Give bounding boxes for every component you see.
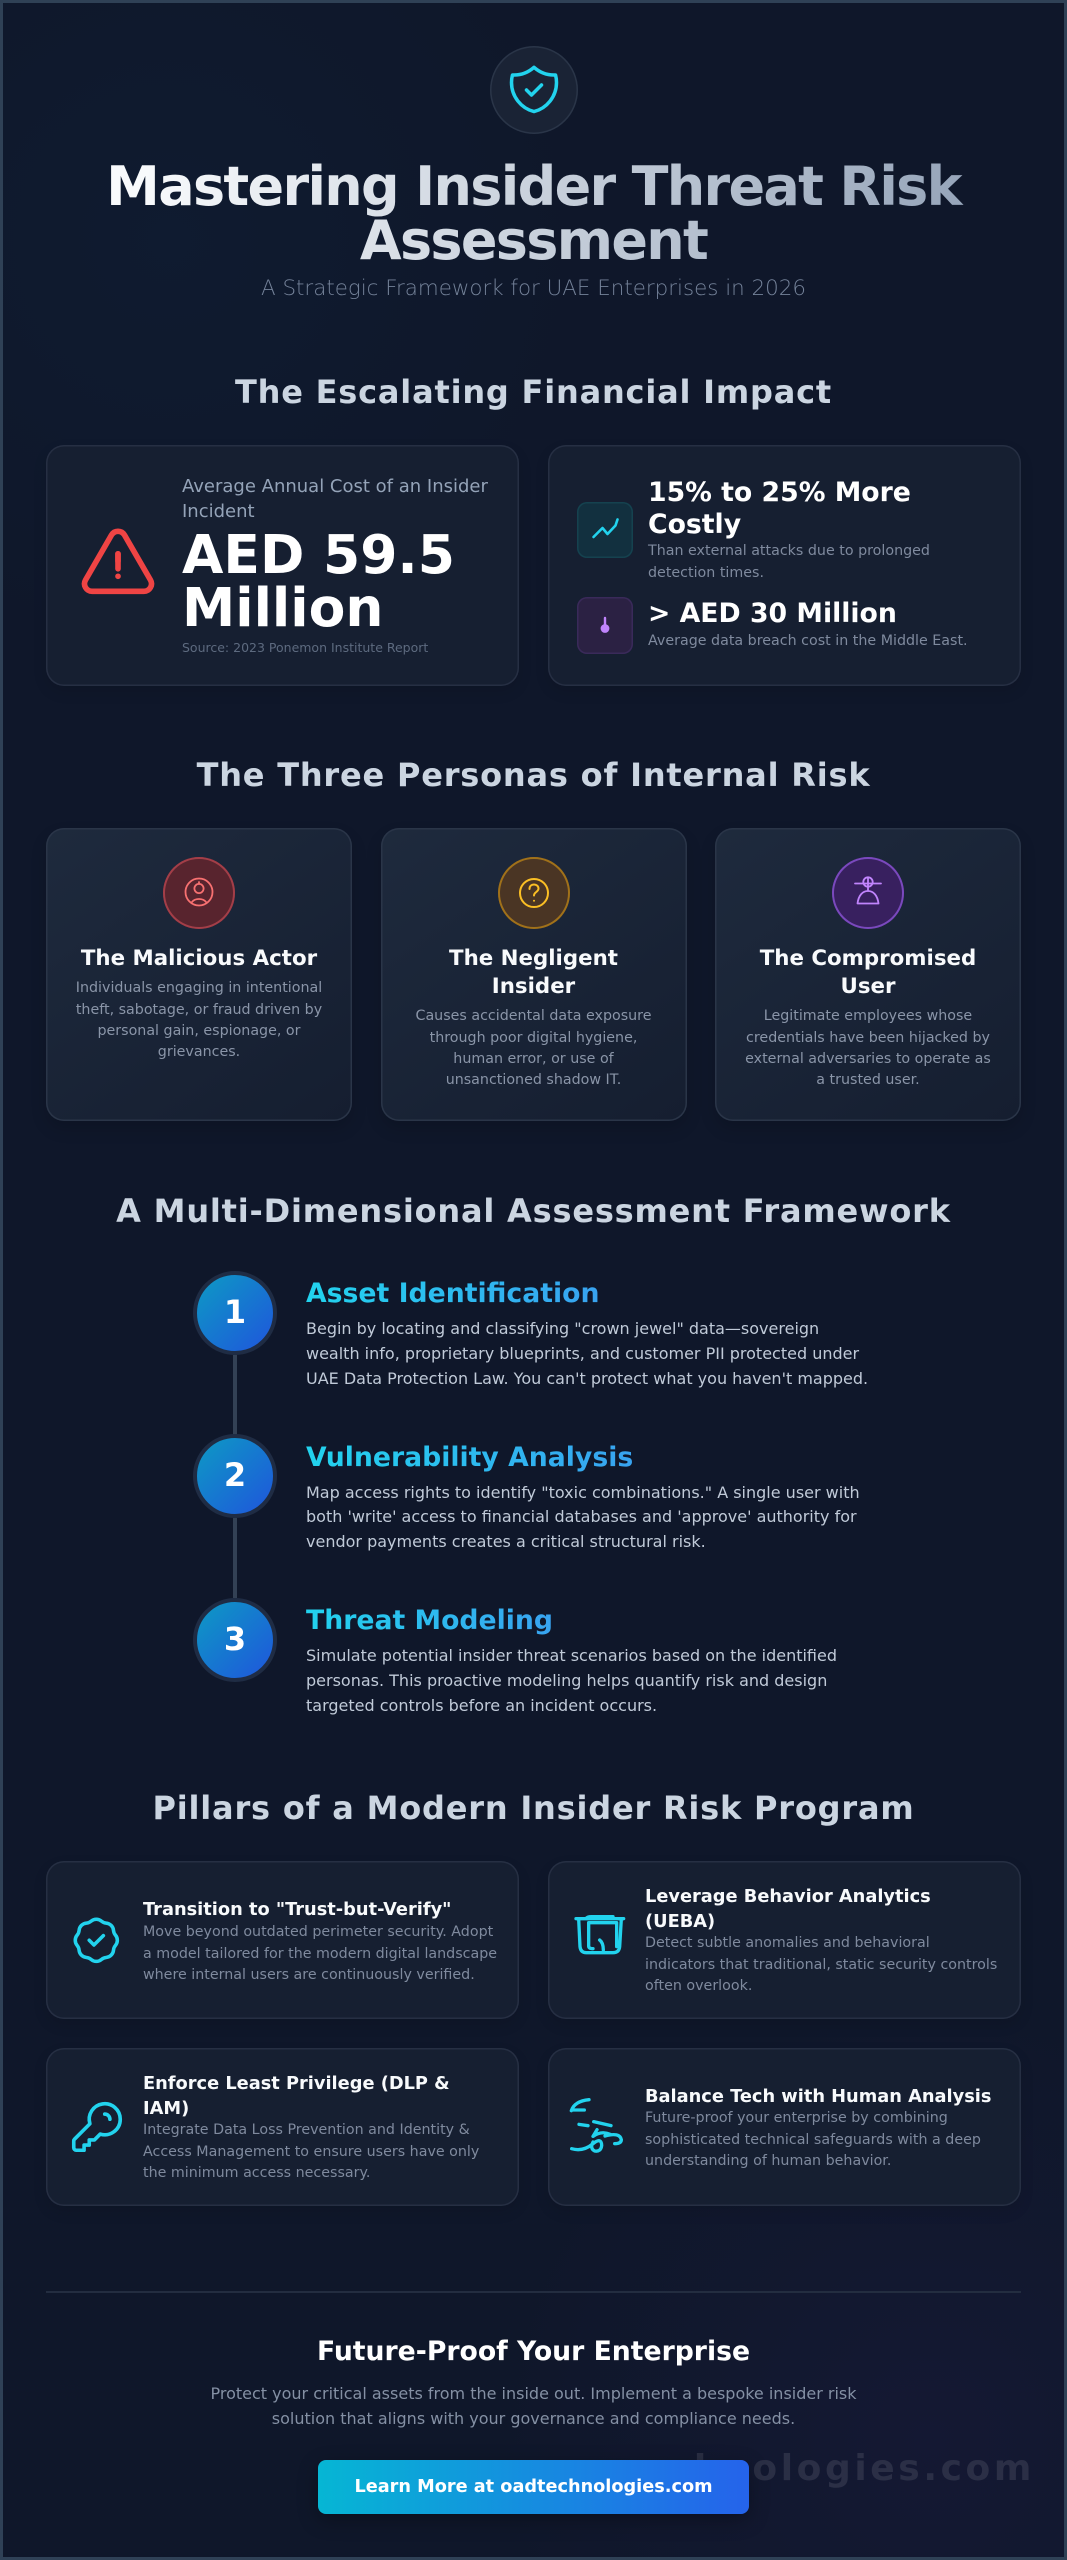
text: detection times: detection times. [648, 565, 764, 581]
step 3 [193, 1598, 837, 1715]
icon: malicious actor [163, 857, 235, 929]
connector [233, 1354, 237, 1434]
step text: personas. This proactive modeling helps quantify risk and design [306, 1671, 827, 1690]
persona description: Legitimate employees whose [764, 1008, 972, 1024]
panel: least privilege [46, 2048, 519, 2206]
number badge 1 [193, 1270, 277, 1354]
stat: 15% to 25% more costly: 15% to 25% More [648, 477, 911, 508]
call to action text: solution that aligns with your governance and compliance needs. [272, 2409, 795, 2428]
heading: personas: The Three Personas of Internal Risk [197, 756, 870, 794]
pillar text: sophisticated technical safeguards with a deep [645, 2132, 981, 2148]
title [46, 160, 1021, 268]
text: detection times [648, 543, 930, 581]
number badge 2 [193, 1434, 277, 1518]
pillar text [143, 2122, 479, 2181]
persona description: theft, sabotage, or fraud driven by [76, 1002, 322, 1018]
panel: trust-but-verify [46, 1861, 519, 2019]
icon: question mark [498, 857, 570, 929]
call to action text: Protect your critical assets from the inside out. Implement a bespoke insider risk [210, 2384, 857, 2403]
step text: Map access rights to identify "toxic combinations." A single user with [306, 1482, 860, 1502]
panel: malicious actor [46, 828, 352, 1121]
pillar text: Integrate Data Loss Prevention and Identity & [143, 2122, 470, 2138]
heading: framework: A Multi-Dimensional Assessment Framework [116, 1192, 951, 1230]
persona title [760, 946, 976, 999]
persona description: through poor digital hygiene, [430, 1030, 637, 1046]
label [182, 476, 488, 522]
step 2 [193, 1434, 860, 1598]
pillar text: the minimum access necessary. [143, 2165, 370, 2181]
pillar text [143, 1924, 497, 1983]
pillar text: understanding of human behavior. [645, 2153, 891, 2169]
text: detection times: Than external attacks due to prolonged [648, 543, 930, 559]
step text: both 'write' access to financial databases and 'approve' authority for [306, 1507, 857, 1526]
step text: vendor payments creates a critical structural risk. [306, 1532, 706, 1551]
icon: droplet [577, 597, 633, 654]
icon: badge check [74, 1918, 120, 1964]
step title: Vulnerability Analysis [306, 1442, 633, 1472]
pillar text: a model tailored for the modern digital landscape [143, 1946, 497, 1962]
persona title: The Compromised [760, 946, 976, 970]
icon: trend chart [577, 502, 633, 558]
step 1 [193, 1271, 868, 1434]
persona title [449, 946, 618, 999]
step title: Asset Identification [306, 1278, 599, 1309]
number badge 1: 1 [224, 1292, 246, 1330]
persona description [76, 980, 322, 1060]
persona description: external adversaries to operate as [745, 1051, 991, 1067]
icon: key [72, 2102, 122, 2152]
label: Incident [182, 501, 255, 522]
title: Mastering Insider Threat Risk [106, 155, 961, 218]
text: data breach cost: Average data breach cost in the Middle East. [648, 633, 968, 649]
step text: targeted controls before an incident occurs. [306, 1696, 657, 1715]
panel: negligent insider [380, 828, 686, 1121]
source: Source: 2023 Ponemon Institute Report [182, 640, 428, 654]
panel: average annual cost [46, 445, 519, 686]
persona title: The Malicious Actor [81, 946, 317, 970]
panel: behavior analytics [548, 1861, 1021, 2019]
pillar text: often overlook. [645, 1978, 752, 1994]
panel: compromised user [715, 828, 1021, 1121]
pillar title: Balance Tech with Human Analysis [645, 2086, 991, 2107]
step text: wealth info, proprietary blueprints, and customer PII protected under [306, 1344, 859, 1363]
persona description: personal gain, espionage, or [97, 1023, 301, 1039]
pillar text [645, 1935, 997, 1994]
button: learn more [318, 2460, 749, 2514]
step text [306, 1319, 868, 1388]
persona description: a trusted user. [816, 1072, 920, 1088]
pillar title: IAM) [143, 2098, 189, 2119]
pillar text: Detect subtle anomalies and behavioral [645, 1935, 930, 1951]
persona description: Causes accidental data exposure [416, 1008, 651, 1024]
persona title: The Negligent [449, 946, 618, 970]
step text: Simulate potential insider threat scenarios based on the identified [306, 1646, 837, 1665]
pillar title: Enforce Least Privilege (DLP & [143, 2073, 450, 2094]
call to action text [210, 2384, 857, 2428]
figure: AED 59.5 Million: AED 59.5 [182, 523, 455, 586]
step title: Threat Modeling [306, 1605, 553, 1636]
persona description [416, 1008, 651, 1088]
pillar title [645, 1886, 931, 1932]
call to action heading: Future-Proof Your Enterprise [317, 2336, 750, 2366]
step text [306, 1482, 860, 1551]
pillar text: Access Management to ensure users have only [143, 2144, 479, 2160]
panel: comparative costs [548, 445, 1021, 686]
persona description: human error, or use of [453, 1051, 614, 1067]
pillar text: where internal users are continuously verified. [143, 1967, 475, 1983]
label: Average Annual Cost of an Insider [182, 476, 488, 497]
pillar title: Leverage Behavior Analytics [645, 1886, 931, 1907]
pillar title: (UEBA) [645, 1911, 715, 1932]
persona title: Insider [492, 974, 575, 999]
connector [233, 1518, 237, 1598]
pillar text: Move beyond outdated perimeter security. Adopt [143, 1924, 493, 1940]
persona description: credentials have been hijacked by [746, 1030, 990, 1046]
title: Assessment [360, 209, 707, 272]
step text: Begin by locating and classifying "crown jewel" data—sovereign [306, 1319, 819, 1338]
persona description: unsanctioned shadow IT. [446, 1072, 621, 1088]
number badge 3 [193, 1598, 277, 1682]
step text: UAE Data Protection Law. You can't protect what you haven't mapped. [306, 1369, 868, 1388]
stat: 15% to 25% more costly: Costly [648, 508, 741, 540]
number badge 2: 2 [224, 1456, 246, 1494]
heading: financial impact: The Escalating Financial Impact [235, 373, 832, 411]
persona description: Individuals engaging in intentional [76, 980, 322, 996]
button: learn more: Learn More at oadtechnologies.com [354, 2477, 713, 2497]
icon: fragmented glyph [570, 2098, 623, 2153]
pillar text [645, 2110, 981, 2169]
icon: analytics box [574, 1915, 626, 1954]
icon: compromised user [832, 857, 904, 929]
pillar title: Transition to "Trust-but-Verify" [143, 1899, 451, 1920]
pillar text: Future-proof your enterprise by combining [645, 2110, 948, 2126]
figure: AED 59.5 Million: Million [182, 576, 383, 639]
persona description [745, 1008, 991, 1088]
pillar title [143, 2073, 450, 2119]
stat: 15% to 25% more costly [648, 477, 911, 540]
heading: pillars: Pillars of a Modern Insider Risk Program [152, 1789, 914, 1827]
stat: AED 30 million: > AED 30 Million [648, 598, 897, 629]
figure: AED 59.5 Million [182, 523, 455, 639]
number badge 3: 3 [224, 1620, 246, 1658]
icon: warning triangle [82, 528, 154, 594]
subtitle: A Strategic Framework for UAE Enterprises in 2026 [261, 276, 806, 301]
icon: shield check [490, 46, 578, 134]
persona description: grievances. [158, 1044, 240, 1060]
step text [306, 1646, 837, 1715]
persona title: User [840, 974, 896, 999]
panel: tech and human [548, 2048, 1021, 2206]
pillar text: indicators that traditional, static security controls [645, 1957, 997, 1973]
